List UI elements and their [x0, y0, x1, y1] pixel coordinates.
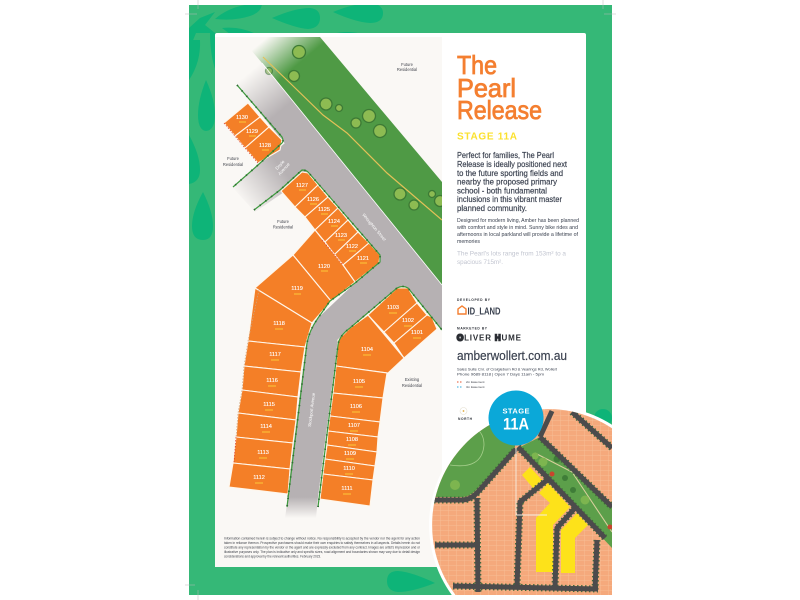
precinct notes: Residential [223, 162, 243, 167]
developer logo [457, 298, 501, 318]
lot numbers: 1109 [344, 451, 356, 457]
precinct notes: Residential [397, 67, 417, 72]
lot size note: spacious 715m². [457, 259, 503, 266]
lead paragraph: inclusions in this vibrant master [457, 194, 562, 204]
lot numbers: 1123 [335, 233, 347, 239]
lead paragraph: planned community. [457, 203, 527, 213]
lot numbers: 1122 [346, 244, 358, 250]
lots 1119 to 1127 [255, 172, 380, 323]
lot numbers: 1106 [350, 404, 362, 410]
precinct notes: Future [227, 156, 240, 161]
title: Release [457, 95, 542, 125]
disclaimer: considerations and approval by the relevant authorities. February 2023. [224, 554, 321, 558]
stage heading: STAGE 11A [457, 132, 517, 142]
lot numbers: 1110 [343, 466, 355, 472]
inset green spaces [436, 425, 515, 497]
lots east side: 1101 to 1111 [320, 288, 437, 506]
disclaimer: taken in reliance thereon. Prospective purchasers should make their own enquiries to satisfy themselves in all aspects. Details herein do not [224, 541, 420, 545]
green border frame [189, 3, 612, 595]
website: amberwollert.com.au [457, 348, 567, 363]
stage badge: 11A [503, 414, 529, 434]
lot size note [457, 250, 566, 266]
lot numbers: 1114 [260, 424, 272, 430]
location inset map [429, 390, 612, 595]
park path [263, 57, 442, 220]
lead paragraph: Release is ideally positioned next [457, 159, 568, 169]
marketer logo: MARKETED BY [457, 326, 488, 330]
street names: Avenue [277, 161, 291, 176]
lot numbers: 1120 [318, 264, 330, 270]
border leaf pattern [189, 3, 612, 592]
easement legend: 3m Easement [466, 385, 485, 389]
lot numbers [236, 115, 423, 494]
developer logo: DEVELOPED BY [457, 298, 491, 302]
lot numbers: 1117 [269, 352, 281, 358]
stage badge [488, 390, 544, 446]
street names: Wroughton Street [361, 212, 388, 242]
easement lines [224, 123, 343, 462]
lot numbers: 1130 [236, 115, 248, 121]
lot numbers: 1112 [253, 475, 265, 481]
lot numbers: 1104 [361, 347, 373, 353]
lead paragraph: school - both fundamental [457, 185, 547, 195]
lot numbers: 1111 [341, 486, 353, 492]
park trees [266, 46, 446, 210]
easement legend: 2m Easement [466, 380, 485, 384]
body paragraph: Designed for modern living, Amber has been planned [457, 218, 579, 224]
address [457, 366, 558, 376]
inset yellow release lots [522, 467, 588, 573]
title: The [457, 50, 497, 80]
street verges [233, 85, 442, 507]
inset pointer line [516, 448, 547, 515]
lot numbers: 1119 [291, 286, 303, 292]
disclaimer: Information contained herein is subject to change without notice. No responsibility is accepted by the vendor nor the agent for any action [224, 536, 420, 540]
stage badge: STAGE [502, 406, 530, 416]
disclaimer: constitute any representation by the vendor or the agent and are expressly excluded from any contract. Images are artist's impression and or [224, 546, 421, 550]
lot numbers: 1126 [307, 197, 319, 203]
street names [274, 159, 388, 427]
lot size note: The Pearl's lots range from 153m² to a [457, 250, 566, 258]
marketer logo: OLIVER HUME [457, 334, 522, 342]
lot numbers: 1102 [402, 318, 414, 324]
lot numbers: 1107 [348, 423, 360, 429]
body paragraph [457, 218, 579, 245]
disclaimer: illustrative purposes only. The plan is indicative only and specific sizes, road alignment and boundaries shown may vary due to detail design [224, 550, 420, 554]
developer logo: ID_LAND [468, 306, 501, 318]
precinct notes: Residential [402, 383, 422, 388]
body paragraph: afternoons in local parkland will provide a lifetime of [457, 232, 579, 238]
lead paragraph: Perfect for families, The Pearl [457, 150, 554, 160]
address: Sales Suite Cnr. of Craigieburn Rd & Vearings Rd, Wollert [457, 366, 558, 372]
site plan panel [215, 33, 446, 567]
address: Phone 9689 8118 | Open 7 Days 11am - 5pm [457, 372, 545, 376]
lot numbers: 1124 [328, 219, 340, 225]
lead paragraph: nearby the proposed primary [457, 177, 558, 187]
street names: Stockport Avenue [307, 392, 316, 427]
lead paragraph [457, 150, 568, 213]
lot numbers: 1103 [387, 305, 399, 311]
disclaimer [224, 536, 421, 558]
street names: Doyle [274, 159, 286, 171]
precinct notes: Future [401, 62, 414, 67]
lots north-west: 1128 to 1130 [224, 103, 282, 163]
inset roads [430, 411, 612, 592]
lot numbers: 1129 [246, 129, 258, 135]
lot numbers: 1127 [296, 183, 308, 189]
title: Pearl [457, 73, 516, 103]
lots west side: 1112 to 1118 [229, 288, 312, 494]
precinct notes: Future [277, 219, 290, 224]
marketer logo [457, 326, 522, 342]
lot numbers: 1125 [318, 207, 330, 213]
body paragraph: memories [457, 239, 480, 245]
lot numbers: 1115 [263, 402, 275, 408]
roads [225, 47, 442, 518]
lot numbers: 1113 [257, 450, 269, 456]
white content panel [215, 33, 586, 567]
lot numbers: 1118 [273, 321, 285, 327]
lead paragraph: to the future sporting fields and [457, 168, 563, 178]
inset trees [450, 452, 612, 530]
park reserve [240, 37, 446, 285]
lot numbers: 1108 [346, 437, 358, 443]
north marker: NORTH [458, 417, 473, 421]
lot numbers: 1128 [259, 143, 271, 149]
title [457, 50, 542, 125]
lot numbers: 1116 [266, 378, 278, 384]
easement legend [457, 380, 485, 389]
lot numbers: 1121 [357, 256, 369, 262]
icon: house [458, 306, 466, 314]
precinct notes: Existing [405, 377, 420, 382]
precinct notes [223, 62, 422, 388]
precinct notes: Residential [273, 224, 293, 230]
body paragraph: with comfort and style in mind. Sunny bike rides and [457, 225, 578, 231]
north marker [458, 408, 473, 421]
lot numbers: 1105 [353, 379, 365, 385]
lot numbers: 1101 [411, 330, 423, 336]
